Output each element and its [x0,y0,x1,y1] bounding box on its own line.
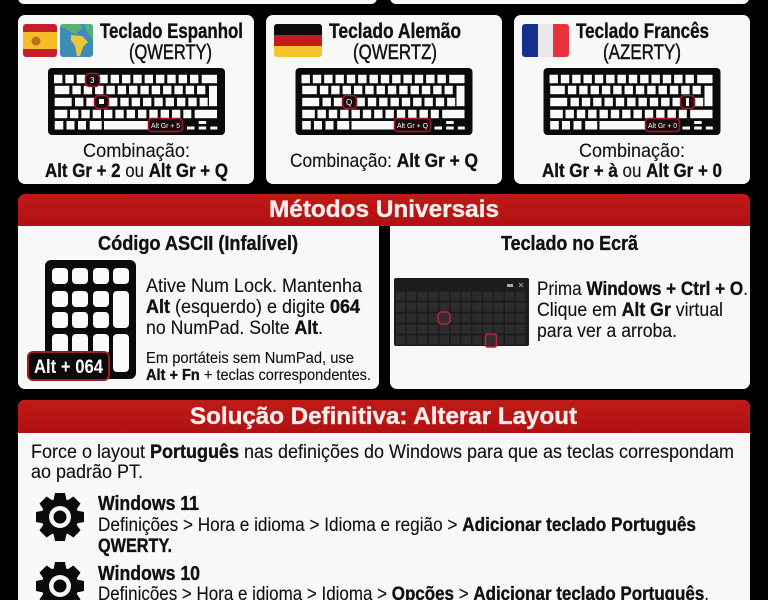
panel: universal methods [18,194,750,389]
keyboard diagram: Spanish: Alt Gr + 5 [151,121,180,130]
icon: French flag [522,24,569,57]
heading: Teclado Alemão: Teclado Alemão [329,20,461,43]
heading: on-screen keyboard: Teclado no Ecrã [501,233,639,255]
text: intro: Force o layout Português nas definições do Windows para que as teclas correspondam [31,442,734,463]
heading: Teclado Francês: Teclado Francês [576,20,709,43]
panel: top right card remnant [390,0,749,4]
icon: numeric keypad with Alt + 064 badge: Alt + 064 [34,357,103,378]
text: ASCII instructions [146,276,362,339]
text: Windows 11 steps: Definições > Hora e idioma > Idioma e região > Adicionar teclado Português [98,515,696,536]
keyboard diagram: French: Alt Gr + 0 [648,121,677,130]
icon: German flag [274,24,322,57]
text: combination label: Combinação: [579,140,685,162]
text: Windows 10 steps: Windows 10 [98,563,200,585]
heading: Teclado Espanhol: Teclado Espanhol [100,20,243,43]
section header: Métodos Universais [18,194,750,226]
heading: AZERTY: (AZERTY) [603,41,681,64]
heading: QWERTY: (QWERTY) [129,41,212,64]
panel: French keyboard [514,15,750,184]
heading: QWERTZ: (QWERTZ) [353,41,437,64]
panel: ASCII code [18,226,379,389]
keyboard diagram: French [544,68,720,135]
panel: on-screen keyboard [390,226,750,389]
panel: top left card remnant [18,0,377,4]
icon: numeric keypad with Alt + 064 badge [28,260,136,380]
keyboard diagram: German: Alt Gr + Q [397,121,428,130]
text: combination: Combinação: Alt Gr + Q [290,150,478,172]
keyboard diagram: Spanish: 3 [90,76,95,85]
section header: Métodos Universais: Métodos Universais [269,196,499,223]
icon: Latin America map [60,24,93,57]
text: combination keys: Alt Gr + 2 ou Alt Gr + Q [45,160,228,182]
image: on-screen keyboard screenshot [394,278,529,347]
text: on-screen keyboard instructions: Clique em Alt Gr virtual [537,300,723,321]
text: on-screen keyboard instructions: Prima Windows + Ctrl + O. [537,279,748,300]
text: ASCII instructions: Alt (esquerdo) e digite 064 [146,297,360,318]
section header: Solução Definitiva [18,400,750,433]
icon: Spanish flag [23,24,57,57]
section header: Solução Definitiva: Solução Definitiva: Alterar Layout [190,403,577,430]
text: laptop note [146,350,371,384]
text: laptop note: Alt + Fn + teclas correspondentes. [146,367,371,384]
keyboard diagram: German: Q [346,98,352,107]
text: Windows 11 steps: QWERTY. [98,536,172,557]
text: combination keys: Alt Gr + à ou Alt Gr + 0 [542,160,722,182]
panel: Spanish keyboard [18,15,254,184]
text: intro [31,442,734,483]
heading: ASCII code: Código ASCII (Infalível) [98,233,298,255]
text: on-screen keyboard instructions: para ver a arroba. [537,321,677,342]
text: Windows 10 steps [98,563,709,600]
text: Windows 11 steps: Windows 11 [98,493,199,515]
text: Windows 11 steps [98,493,696,557]
text: combination label: Combinação: [83,140,190,162]
panel: German keyboard [266,15,502,184]
text: ASCII instructions: Ative Num Lock. Mantenha [146,276,362,297]
text: ASCII instructions: no NumPad. Solte Alt. [146,318,323,339]
icon: gear Windows 10 [36,562,84,600]
panel: definitive solution [18,400,750,600]
icon: gear Windows 11 [36,493,84,541]
keyboard diagram: Spanish [48,68,225,135]
text: intro: ao padrão PT. [31,462,143,483]
text: on-screen keyboard instructions [537,279,748,342]
keyboard diagram: German [296,68,472,135]
text: laptop note: Em portáteis sem NumPad, use [146,350,354,367]
